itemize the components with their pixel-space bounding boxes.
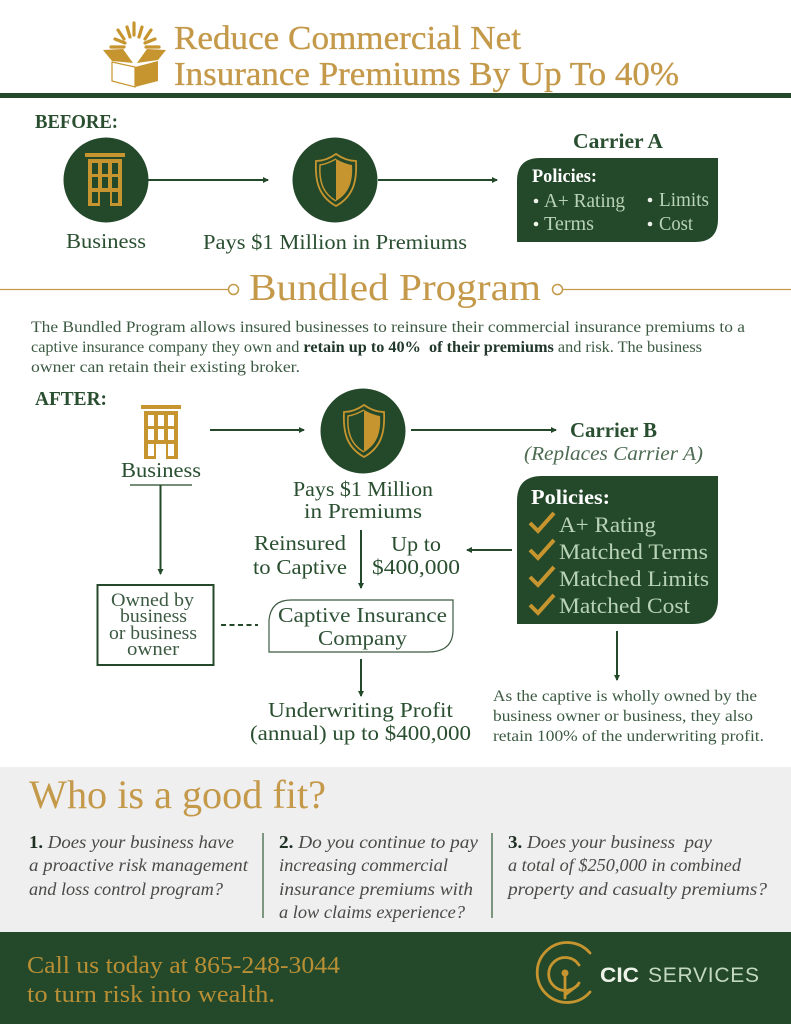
arrow xyxy=(616,631,618,680)
question 3: 3. Does your business pay xyxy=(508,832,712,852)
arrow xyxy=(467,549,512,551)
logo: cic services xyxy=(537,943,759,1003)
panel: carrier b policies xyxy=(517,476,718,624)
text block: bundled program description: captive insurance company they own and retain up to 40% of their premiums and risk. The business xyxy=(31,339,702,356)
arrow xyxy=(360,530,362,588)
arrow xyxy=(210,429,304,431)
heading: before: BEFORE: xyxy=(35,111,118,133)
arrow xyxy=(411,429,556,431)
panel: who is a good fit xyxy=(0,767,791,932)
label: pays premiums: Pays $1 Million in Premiums xyxy=(203,230,467,254)
panel: carrier a policies: A+ Rating xyxy=(544,190,625,212)
panel: carrier a policies: Terms xyxy=(544,213,594,235)
box: owned by business: or business xyxy=(109,624,197,644)
panel: carrier a policies: Cost xyxy=(659,213,693,235)
question 1: a proactive risk management xyxy=(29,855,249,875)
label: underwriting profit xyxy=(250,698,471,745)
question 3: a total of $250,000 in combined xyxy=(508,855,742,875)
label: reinsured to captive xyxy=(253,531,347,579)
icon: checks xyxy=(530,513,554,613)
label: pays premiums: in Premiums xyxy=(304,499,422,523)
label: business: Business xyxy=(66,229,146,253)
panel: carrier b policies: Matched Terms xyxy=(559,539,708,564)
arrow xyxy=(360,659,362,696)
arrow xyxy=(148,179,268,181)
icon: building in circle xyxy=(64,138,148,222)
question 3: property and casualty premiums? xyxy=(506,879,767,899)
question 1 xyxy=(29,832,249,899)
call to action xyxy=(27,953,340,1008)
panel: after xyxy=(35,388,764,745)
panel: carrier b policies: Matched Limits xyxy=(559,566,709,591)
question 3 xyxy=(506,832,767,899)
question 2: a low claims experience? xyxy=(279,902,465,922)
label: carrier a: Carrier A xyxy=(573,129,664,153)
logo: cic services: CIC xyxy=(600,964,639,987)
title: Insurance Premiums By Up To 40% xyxy=(174,56,679,93)
heading: bundled program xyxy=(0,267,791,309)
panel: carrier a policies: Limits xyxy=(659,189,709,211)
box: captive insurance company: Company xyxy=(318,626,408,650)
panel: before xyxy=(35,111,718,254)
text block: captive note xyxy=(493,688,764,745)
logo: cic services: SERVICES xyxy=(648,964,759,987)
box: owned by business: owner xyxy=(127,640,179,660)
question 2 xyxy=(279,832,478,922)
label: underwriting profit: Underwriting Profit xyxy=(268,698,453,722)
icon: open box with rays xyxy=(103,23,166,87)
panel: carrier b policies: Policies: xyxy=(531,485,610,509)
panel: carrier b policies: Matched Cost xyxy=(559,593,690,618)
label: business: Business xyxy=(121,458,201,482)
label: reinsured to captive: Reinsured xyxy=(254,531,347,555)
panel: carrier b policies: A+ Rating xyxy=(559,512,656,537)
panel: carrier a policies: Policies: xyxy=(532,166,597,187)
text block: captive note: As the captive is wholly owned by the xyxy=(493,688,757,705)
text block: captive note: retain 100% of the underwriting profit. xyxy=(493,728,764,745)
heading: who is a good fit: Who is a good fit? xyxy=(29,772,326,817)
label: up to 400,000: $400,000 xyxy=(372,555,460,579)
arrow xyxy=(160,485,162,574)
question 2: insurance premiums with xyxy=(279,879,473,899)
label: up to 400,000 xyxy=(372,532,460,579)
box: captive insurance company xyxy=(269,600,453,652)
heading: bundled program: Bundled Program xyxy=(249,267,541,309)
call to action: to turn risk into wealth. xyxy=(27,982,275,1008)
label: replaces carrier a: (Replaces Carrier A) xyxy=(524,444,703,465)
icon: shield in circle xyxy=(320,388,406,474)
arrow xyxy=(378,179,497,181)
question 2: increasing commercial xyxy=(279,855,448,875)
icon: building xyxy=(141,405,181,459)
question 1: and loss control program? xyxy=(29,879,223,899)
text block: captive note: business owner or business, they also xyxy=(493,708,753,725)
label: up to 400,000: Up to xyxy=(391,532,441,556)
dashed connector xyxy=(221,624,258,626)
label: underwriting profit: (annual) up to $400,000 xyxy=(250,721,471,745)
heading: after: AFTER: xyxy=(35,388,107,410)
text block: bundled program description: owner can retain their existing broker. xyxy=(31,359,300,376)
label: pays premiums xyxy=(293,477,434,523)
title xyxy=(174,20,679,93)
label: pays premiums: Pays $1 Million xyxy=(293,477,434,501)
question 1: 1. Does your business have xyxy=(29,832,234,852)
label: reinsured to captive: to Captive xyxy=(253,555,347,579)
text block: bundled program description xyxy=(31,319,745,376)
question 2: 2. Do you continue to pay xyxy=(279,832,478,852)
call to action: Call us today at 865-248-3044 xyxy=(27,953,340,979)
text block: bundled program description: The Bundled Program allows insured businesses to reinsure their commercial insurance premiums to a xyxy=(31,319,745,336)
box: owned by business: business xyxy=(120,607,187,627)
label: carrier b: Carrier B xyxy=(570,418,657,442)
footer xyxy=(0,932,791,1024)
box: captive insurance company: Captive Insurance xyxy=(278,603,447,627)
box: owned by business: Owned by xyxy=(111,591,195,611)
title: Reduce Commercial Net xyxy=(174,20,522,57)
panel: carrier a policies xyxy=(517,158,718,242)
icon: shield in circle xyxy=(292,138,378,222)
box: owned by business xyxy=(98,585,214,665)
